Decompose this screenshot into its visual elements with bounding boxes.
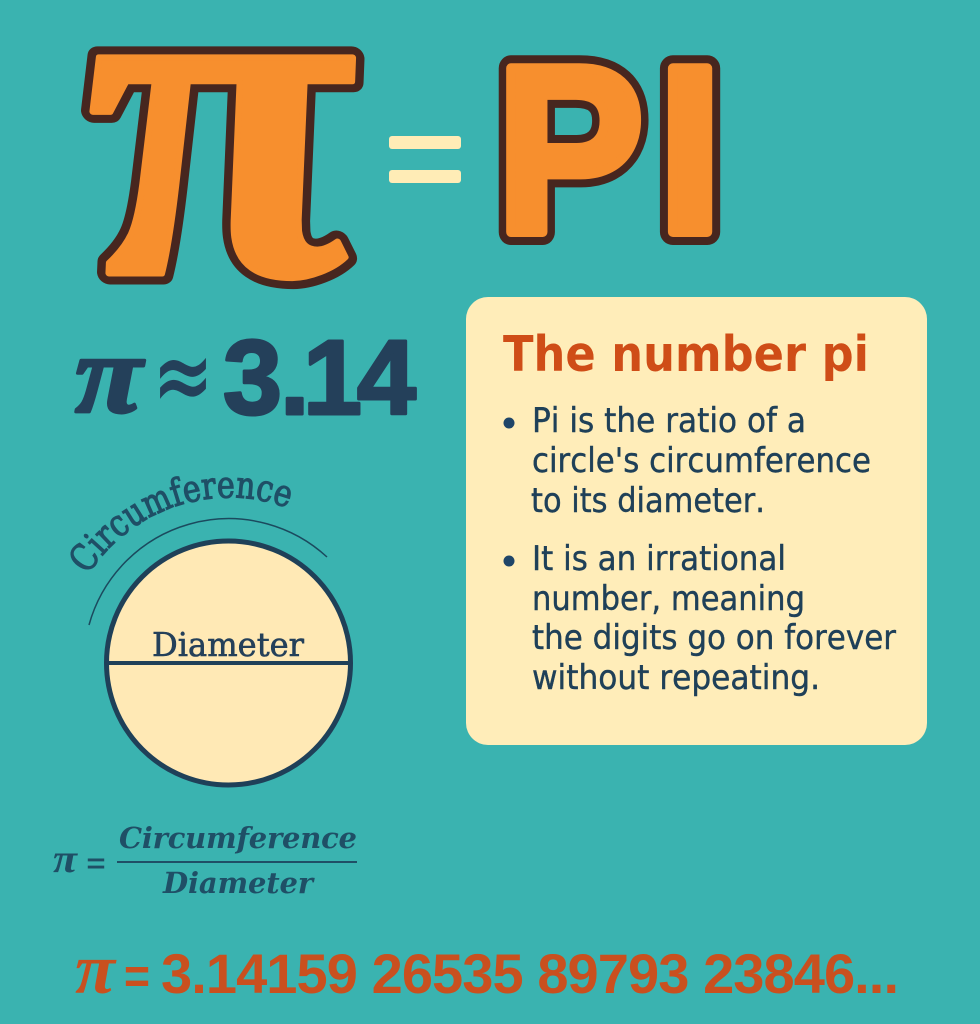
formula: π: [53, 836, 78, 881]
approximate value: π: [75, 313, 145, 437]
bullet two: without repeating.: [532, 658, 820, 698]
bullet one: to its diameter.: [531, 481, 765, 521]
formula: [53, 821, 357, 900]
approximate value: ≈: [153, 314, 213, 436]
title: word PI: P: [496, 18, 644, 283]
panel heading: The number pi: [503, 326, 869, 383]
formula: =: [85, 843, 107, 884]
approximate value: 3.14: [223, 319, 416, 437]
pi digits: π: [75, 929, 117, 1009]
bullet two: the digits go on forever: [532, 618, 896, 658]
title: word PI: I: [657, 18, 723, 283]
title: equals sign: [389, 136, 461, 183]
circumference arc: [89, 519, 327, 625]
bullet one: circle's circumference: [532, 441, 871, 481]
panel: the number pi: [466, 297, 927, 745]
circle diagram: [70, 476, 353, 788]
diameter label: Diameter: [152, 625, 304, 664]
bullet one: [504, 401, 871, 521]
circle: [106, 541, 350, 785]
pi digits: 3.14159 26535 89793 23846...: [161, 942, 899, 1005]
pi digits: =: [124, 948, 150, 1004]
diameter line: [106, 661, 351, 665]
bullet two: It is an irrational: [532, 539, 786, 579]
title: word PI: P: [496, 18, 644, 283]
formula: Circumference: [119, 821, 357, 855]
bullet two: [504, 539, 896, 698]
bullet one: Pi is the ratio of a: [532, 401, 806, 441]
approximate value: [75, 313, 416, 437]
title: word PI: I: [657, 18, 723, 283]
formula: Diameter: [162, 866, 316, 900]
title: word PI: [496, 18, 723, 283]
bullet two: number, meaning: [532, 579, 805, 619]
circumference label: Circumference: [70, 476, 291, 570]
